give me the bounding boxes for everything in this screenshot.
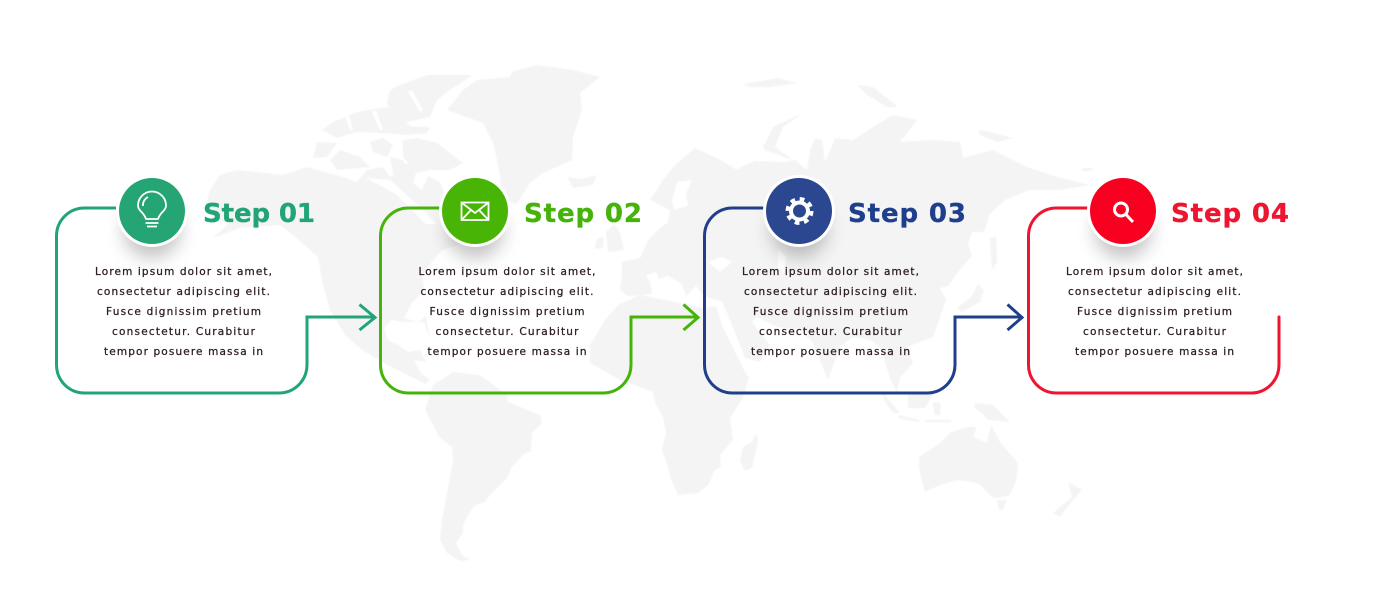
- connector outline and arrow: [704, 208, 1022, 393]
- connector outline and arrow: [56, 208, 375, 393]
- step 4 card: [1028, 175, 1289, 393]
- body text: consectetur. Curabitur: [112, 326, 256, 338]
- body text: [1066, 266, 1243, 358]
- madagascar: [740, 433, 758, 471]
- body text: consectetur adipiscing elit.: [420, 286, 594, 298]
- body text: consectetur adipiscing elit.: [97, 286, 270, 298]
- body text: Lorem ipsum dolor sit amet,: [742, 266, 919, 278]
- body text: consectetur adipiscing elit.: [1068, 286, 1241, 298]
- body text: Lorem ipsum dolor sit amet,: [418, 266, 596, 278]
- australia: [919, 425, 1018, 498]
- eurasia: [620, 115, 1090, 392]
- body text: tempor posuere massa in: [428, 346, 586, 358]
- icon: gear: [763, 175, 835, 258]
- step 3 card: [704, 175, 1022, 393]
- heading: Step 03: [848, 199, 966, 229]
- body text: consectetur adipiscing elit.: [744, 286, 917, 298]
- iceland: [567, 175, 597, 188]
- step 1 card: [56, 175, 375, 393]
- icon: magnifier: [1087, 175, 1159, 258]
- body text: consectetur. Curabitur: [1083, 326, 1227, 338]
- body text: [95, 266, 272, 358]
- arctic islands: [387, 75, 473, 127]
- heading: Step 01: [203, 199, 315, 229]
- south america: [425, 372, 542, 561]
- body text: Lorem ipsum dolor sit amet,: [1066, 266, 1243, 278]
- british isles: [606, 224, 624, 252]
- heading: Step 02: [524, 199, 642, 229]
- body text: [418, 266, 596, 358]
- outline: [1028, 208, 1279, 393]
- body text: Lorem ipsum dolor sit amet,: [95, 266, 272, 278]
- tasmania: [997, 500, 1007, 510]
- svalbard and northern islands: [743, 78, 797, 87]
- body text: Fusce dignissim pretium: [106, 306, 261, 318]
- body text: [742, 266, 919, 358]
- step 2 card: [380, 175, 698, 393]
- greenland: [447, 65, 600, 205]
- body text: tempor posuere massa in: [1075, 346, 1234, 358]
- novaya zemlya: [763, 113, 803, 160]
- body text: tempor posuere massa in: [104, 346, 263, 358]
- icon: light bulb: [116, 175, 188, 258]
- body text: consectetur. Curabitur: [436, 326, 579, 338]
- japan and sakhalin: [957, 284, 984, 312]
- north america: [206, 163, 470, 384]
- inland seas and channels of the map: [345, 90, 786, 294]
- body text: Fusce dignissim pretium: [430, 306, 584, 318]
- icon: envelope: [439, 175, 511, 258]
- world map background: [206, 65, 1093, 561]
- body text: consectetur. Curabitur: [759, 326, 903, 338]
- connector outline and arrow: [380, 208, 698, 393]
- body text: tempor posuere massa in: [751, 346, 910, 358]
- new zealand: [1053, 482, 1082, 517]
- africa: [590, 295, 749, 495]
- body text: Fusce dignissim pretium: [753, 306, 908, 318]
- heading: Step 04: [1171, 199, 1289, 229]
- body text: Fusce dignissim pretium: [1077, 306, 1232, 318]
- sumatra java borneo sulawesi new guinea: [882, 392, 900, 413]
